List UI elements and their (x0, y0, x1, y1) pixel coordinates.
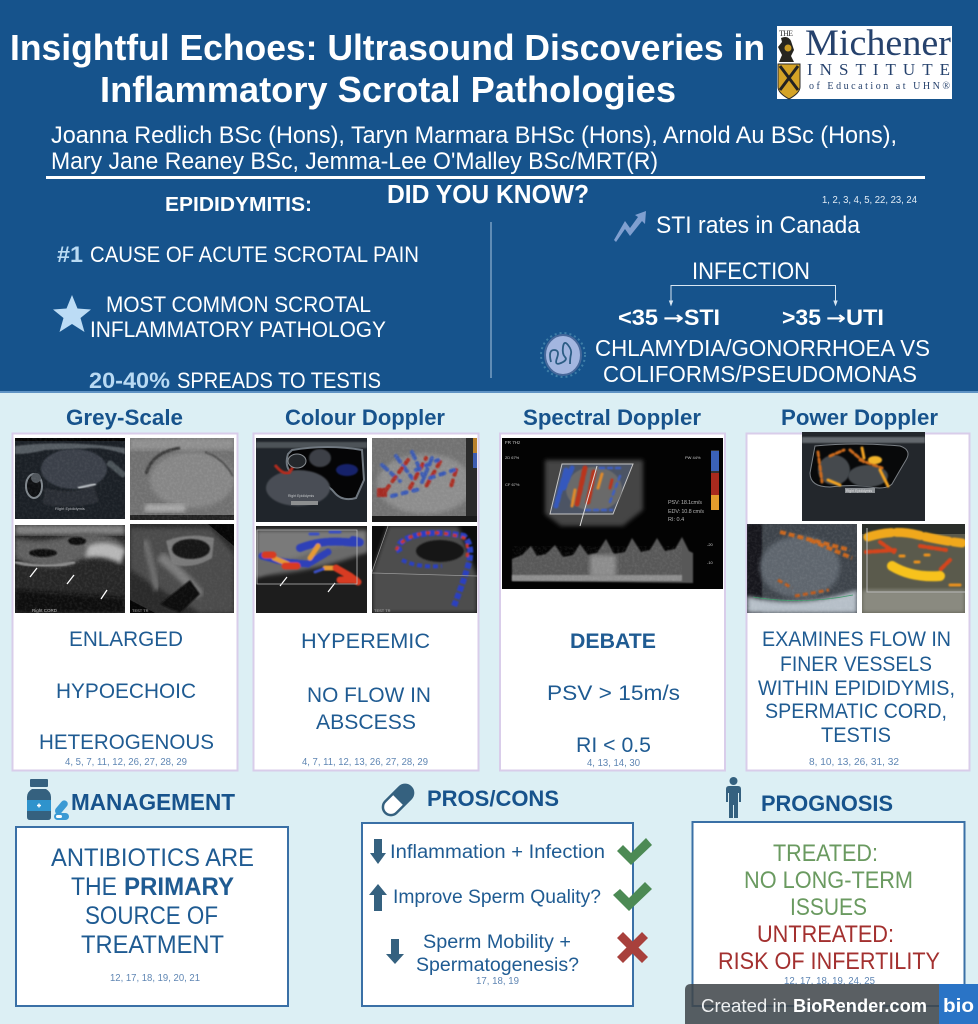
text: antibiotics statement: ANTIBIOTICS ARE (51, 844, 254, 872)
image: power doppler close-up (862, 524, 965, 613)
age split: STI vs UTI: → (663, 308, 684, 329)
references: did you know: 1, 2, 3, 4, 5, 22, 23, 24 (822, 195, 917, 206)
icon: check mark (617, 838, 652, 865)
text: power doppler description (758, 628, 955, 747)
heading: pros and cons: PROS/CONS (427, 786, 559, 811)
heading: management: MANAGEMENT (71, 789, 235, 815)
text: debate: DEBATE (570, 630, 656, 653)
logo: Michener Institute: Michener (805, 23, 951, 64)
heading: prognosis: PROGNOSIS (761, 791, 893, 816)
image: grey-scale testis abscess (130, 524, 234, 613)
image: spectral doppler scan: PW 44% (685, 455, 701, 460)
organisms text (595, 335, 930, 387)
organisms text: COLIFORMS/PSEUDOMONAS (603, 361, 917, 387)
age split: STI vs UTI (618, 305, 884, 330)
title: Insightful Echoes: Ultrasound Discoveries in (10, 27, 765, 68)
logo: Michener Institute: INSTITUTE (807, 60, 950, 79)
image: spectral doppler scan (502, 438, 723, 589)
text: enlarged: ENLARGED (69, 628, 183, 651)
text: hypoechoic: HYPOECHOIC (56, 680, 196, 703)
authors: Joanna Redlich BSc (Hons), Taryn Marmara BHSc (Hons), Arnold Au BSc (Hons), (51, 122, 897, 149)
icon: trend arrow up (614, 211, 646, 242)
image: colour doppler testis tilted (372, 526, 477, 613)
references: spectral doppler: 4, 13, 14, 30 (587, 758, 640, 769)
heading: grey-scale: Grey-Scale (66, 405, 183, 430)
image: spectral doppler scan: 2D 67% (505, 455, 520, 460)
image: spectral doppler scan: RI: 0.4 (668, 517, 684, 523)
icon: medicine bottle and pills (27, 779, 69, 820)
heading: spectral doppler: Spectral Doppler (523, 405, 701, 430)
text: PSV threshold: PSV > 15m/s (547, 682, 680, 705)
authors: Mary Jane Reaney BSc, Jemma-Lee O'Malley BSc/MRT(R) (51, 148, 658, 175)
infection heading: INFECTION (692, 258, 810, 285)
text: antibiotics statement: PRIMARY (124, 873, 234, 901)
fact: number one cause: #1 (57, 242, 83, 267)
logo: Michener Institute: THE (779, 29, 793, 38)
header panel background (0, 0, 978, 393)
age split: STI vs UTI: UTI (846, 305, 884, 330)
icon: star (53, 295, 91, 332)
heading: epididymitis: EPIDIDYMITIS: (165, 194, 312, 216)
heading: power doppler: Power Doppler (781, 405, 938, 430)
image: colour doppler spermatic cord (256, 526, 367, 613)
text: RI threshold: RI < 0.5 (576, 734, 651, 757)
fact: spread to testis (89, 368, 381, 393)
STI rates text: STI rates in Canada (656, 212, 861, 239)
text: sperm mobility (416, 932, 579, 976)
badge: created in BioRender: BioRender.com (793, 996, 927, 1016)
text: treated outcome (744, 840, 913, 921)
text: antibiotics statement: SOURCE OF (85, 902, 218, 930)
text: antibiotics statement: THE (71, 873, 117, 901)
panel: spectral doppler (500, 434, 725, 770)
text: no flow in abscess: NO FLOW IN (307, 684, 431, 707)
logo: Michener Institute: of Education at UHN® (809, 81, 950, 92)
image: spectral doppler scan: CF 67% (505, 482, 520, 487)
text: no flow in abscess (307, 684, 431, 734)
image: power doppler epididymis: Right Epididymis (846, 489, 872, 493)
text: sperm mobility: Spermatogenesis? (416, 955, 579, 976)
image: spectral doppler scan: EDV: 10.8 cm/s (668, 509, 704, 515)
text: treated outcome: TREATED: (773, 840, 878, 867)
badge: created in BioRender: Created in (701, 996, 787, 1016)
text: treated outcome: ISSUES (790, 894, 867, 921)
logo: Michener Institute (777, 23, 952, 99)
text: power doppler description: SPERMATIC CORD, (765, 700, 947, 723)
icon: cross mark (617, 932, 648, 963)
authors (51, 122, 897, 175)
references: pros and cons: 17, 18, 19 (476, 976, 519, 987)
fact: number one cause: CAUSE OF ACUTE SCROTAL PAIN (90, 242, 419, 267)
image: grey-scale testis abscess: TEST TR (132, 608, 149, 613)
age split: STI vs UTI: → (826, 308, 846, 329)
title: Inflammatory Scrotal Pathologies (100, 69, 676, 110)
icon: capsule (379, 780, 418, 819)
image: colour doppler epididymis (256, 438, 367, 522)
references: grey-scale: 4, 5, 7, 11, 12, 26, 27, 28, 29 (65, 757, 187, 768)
icon: down arrow (370, 839, 386, 864)
image: spectral doppler scan: FR 7Hz (505, 440, 521, 445)
text: power doppler description: WITHIN EPIDIDYMIS, (758, 677, 955, 700)
age split: STI vs UTI: STI (684, 305, 720, 330)
references: power doppler: 8, 10, 13, 26, 31, 32 (809, 757, 899, 768)
image: power doppler testis (747, 524, 857, 613)
badge: created in BioRender (685, 984, 978, 1024)
image: grey-scale testis transverse: Right Epididymis (55, 506, 85, 511)
text: sperm quality: Improve Sperm Quality? (393, 887, 601, 908)
heading: did you know: DID YOU KNOW? (387, 179, 589, 209)
panel: management (16, 827, 288, 1006)
image: grey-scale enlarged epididymis (130, 438, 234, 520)
references: management: 12, 17, 18, 19, 20, 21 (110, 973, 200, 984)
panel: grey-scale (12, 434, 238, 770)
image: colour doppler testis tilted: TEST TR (374, 608, 391, 613)
image: colour doppler epididymis: Right Epididymis (288, 494, 314, 498)
organisms text: CHLAMYDIA/GONORRHOEA VS (595, 335, 930, 361)
icon: check mark (613, 882, 652, 911)
text: power doppler description: FINER VESSELS (780, 653, 932, 676)
panel: pros and cons (362, 823, 652, 1006)
image: spectral doppler scan: -20 (707, 542, 714, 547)
image: power doppler epididymis (802, 432, 925, 521)
text: inflammation and infection: Inflammation + Infection (390, 842, 605, 863)
text: power doppler description: EXAMINES FLOW IN (762, 628, 951, 651)
image: spectral doppler scan: -10 (707, 560, 714, 565)
icon: bacterium (541, 333, 585, 377)
icon: down arrow (386, 939, 404, 964)
age split: STI vs UTI: <35 (618, 305, 658, 330)
badge: created in BioRender: bio (943, 996, 974, 1017)
icon: up arrow (369, 884, 387, 911)
text: untreated outcome (718, 921, 940, 975)
text: heterogenous: HETEROGENOUS (39, 731, 214, 754)
panel: prognosis (692, 822, 964, 1006)
icon: person (726, 777, 741, 818)
text: untreated outcome: UNTREATED: (757, 921, 894, 948)
text: antibiotics statement: TREATMENT (81, 931, 224, 959)
text: no flow in abscess: ABSCESS (316, 711, 416, 734)
image: colour doppler testis (372, 438, 477, 522)
heading: colour doppler: Colour Doppler (285, 405, 445, 430)
references: colour doppler: 4, 7, 11, 12, 13, 26, 27, 28, 29 (302, 757, 428, 768)
fact: most common pathology: MOST COMMON SCROTAL (106, 292, 371, 317)
text: hyperemic: HYPEREMIC (301, 630, 430, 653)
image: grey-scale spermatic cord (15, 525, 125, 613)
references: prognosis: 12, 17, 18, 19, 24, 25 (784, 976, 875, 987)
fact: spread to testis: 20-40% (89, 368, 170, 393)
fact: spread to testis: SPREADS TO TESTIS (177, 368, 381, 393)
text: power doppler description: TESTIS (821, 724, 891, 747)
fact: most common pathology: INFLAMMATORY PATHOLOGY (90, 317, 386, 342)
title (10, 27, 765, 110)
text: untreated outcome: RISK OF INFERTILITY (718, 948, 940, 975)
image: grey-scale spermatic cord: Right CORD (32, 608, 58, 613)
text: treated outcome: NO LONG-TERM (744, 867, 913, 894)
panel: colour doppler (254, 434, 478, 770)
image: spectral doppler scan: PSV: 18.1cm/s (668, 500, 702, 506)
age split: STI vs UTI: >35 (782, 305, 821, 330)
text: sperm mobility: Sperm Mobility + (423, 932, 571, 953)
image: grey-scale testis transverse (15, 438, 125, 519)
fact: most common pathology (90, 292, 386, 342)
text: antibiotics statement (51, 844, 254, 959)
panel: power doppler (746, 432, 970, 770)
bracket arrows: infection split (670, 286, 837, 305)
